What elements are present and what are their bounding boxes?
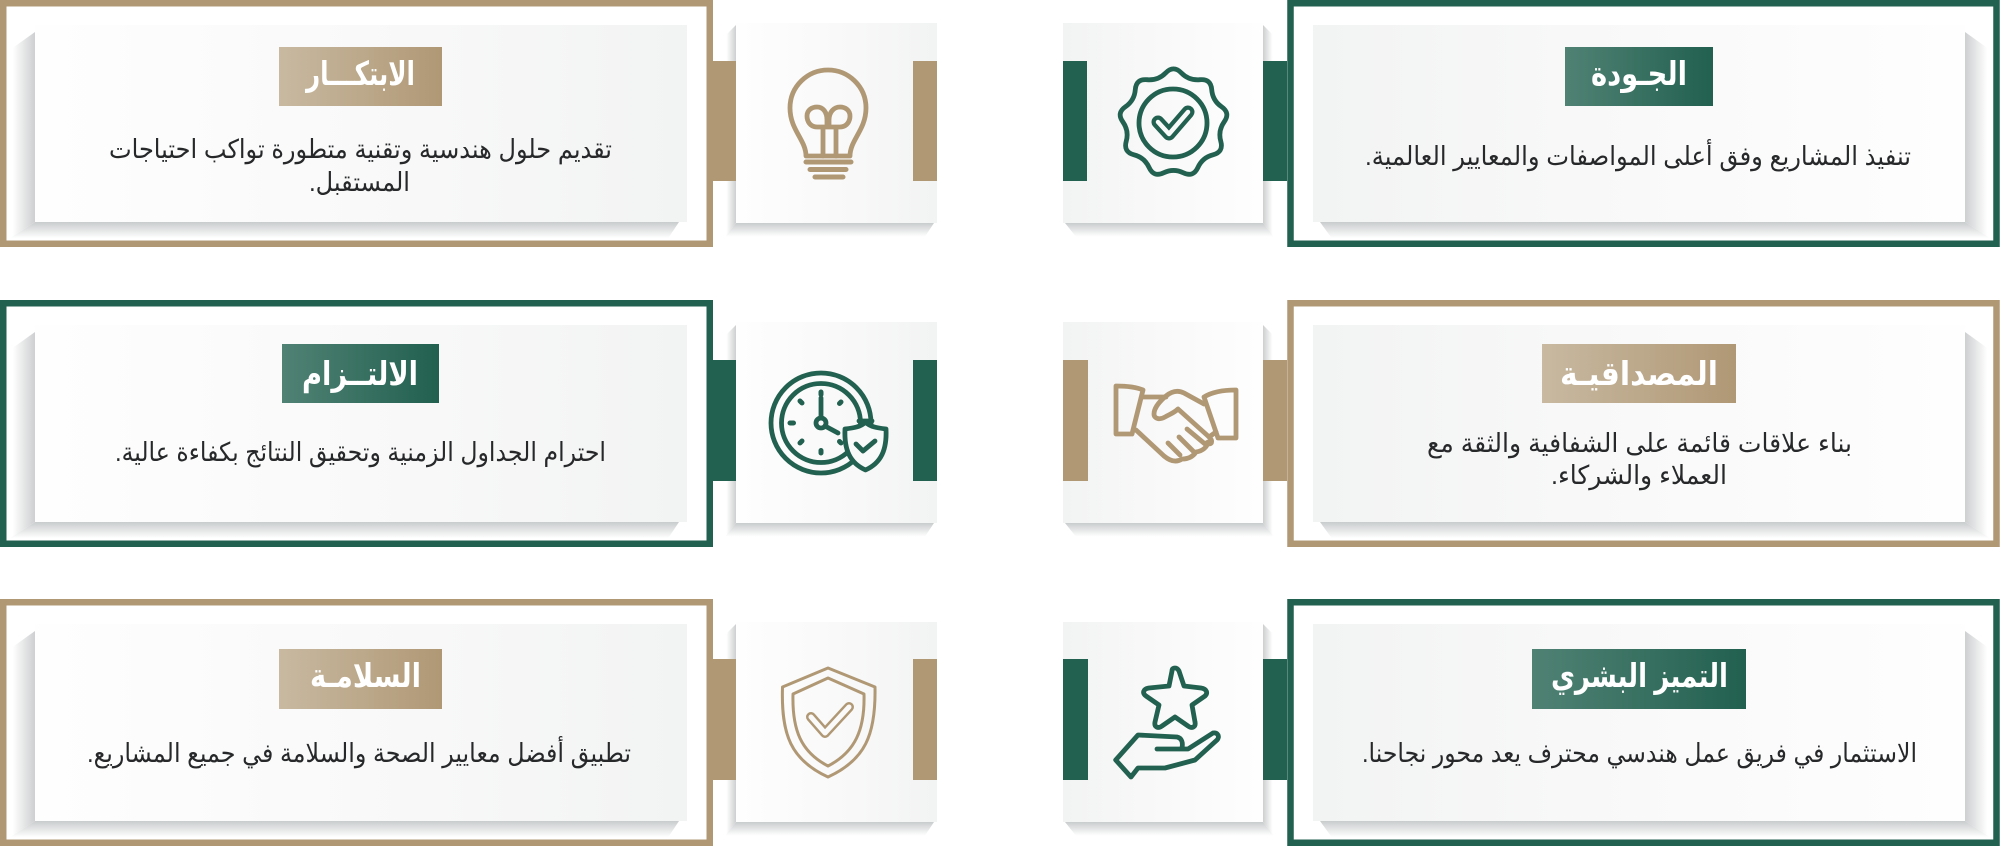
connector band (1263, 659, 1287, 780)
title label (279, 47, 442, 106)
tab (913, 659, 937, 780)
description: الاستثمار في فريق عمل هندسي محترف يعد محور نجاحنا. (1362, 738, 1917, 769)
connector band (713, 659, 736, 780)
icon box (736, 322, 937, 523)
tab (1063, 659, 1088, 780)
tab (913, 61, 937, 181)
icon box (1063, 23, 1263, 223)
connector band (713, 360, 736, 481)
title: الالتــزام (302, 355, 418, 394)
panel shadow (1320, 332, 1993, 540)
text panel (35, 325, 687, 522)
connector band (1263, 61, 1287, 181)
icon box (1063, 622, 1263, 822)
frame (1290, 303, 1996, 544)
description: تطبيق أفضل معايير الصحة والسلامة في جميع المشاريع. (87, 735, 631, 769)
card: quality (1063, 3, 1996, 244)
icon: safety shield (782, 668, 875, 777)
title label (1565, 47, 1713, 106)
icon box shadow (1065, 325, 1275, 538)
icon box shadow (724, 325, 934, 538)
tab (913, 360, 937, 481)
title: السلامـة (310, 657, 421, 694)
title label (1532, 649, 1746, 709)
title label (1542, 344, 1736, 403)
title label (279, 649, 442, 709)
icon: light bulb (790, 70, 866, 177)
icon box (736, 622, 937, 822)
frame (3, 3, 710, 244)
description: تنفيذ المشاريع وفق أعلى المواصفات والمعايير العالمية. (1365, 138, 1911, 172)
card: credibility (1063, 303, 1996, 544)
card: human excellence (1063, 602, 1996, 843)
icon: quality badge (1120, 69, 1227, 174)
icon box shadow (1065, 624, 1275, 837)
title: المصداقيـة (1560, 355, 1718, 392)
title: الجـودة (1591, 55, 1687, 94)
line 1: بناء علاقات قائمة على الشفافية والثقة مع (1427, 428, 1852, 459)
icon box shadow (724, 25, 934, 238)
panel shadow (7, 332, 679, 540)
icon: star over hand (1116, 668, 1218, 777)
connector band (1263, 360, 1287, 481)
card: safety (3, 602, 937, 843)
frame (3, 602, 710, 843)
icon box (736, 23, 937, 223)
card: commitment (3, 303, 937, 544)
description: احترام الجداول الزمنية وتحقيق النتائج بكفاءة عالية. (115, 437, 606, 468)
icon box (1063, 322, 1263, 523)
icon box shadow (724, 624, 934, 837)
icon box shadow (1065, 25, 1275, 238)
frame (1290, 3, 1996, 244)
panel shadow (7, 631, 679, 839)
panel shadow (7, 32, 679, 240)
line 2: العملاء والشركاء. (1551, 460, 1727, 491)
text panel (35, 624, 687, 821)
frame (1290, 602, 1996, 843)
line 2: المستقبل. (309, 167, 410, 197)
tab (1063, 61, 1087, 181)
card: innovation (3, 3, 937, 244)
panel shadow (1320, 32, 1993, 240)
text panel (35, 25, 687, 222)
connector band (713, 61, 736, 181)
icon: clock with shield (771, 373, 886, 473)
frame (3, 303, 710, 544)
text panel (1313, 25, 1965, 222)
tab (1063, 360, 1088, 481)
text panel (1313, 624, 1965, 821)
panel shadow (1320, 631, 1993, 839)
icon: handshake (1116, 386, 1236, 461)
line 1: تقديم حلول هندسية وتقنية متطورة تواكب احتياجات (109, 134, 612, 165)
title label (282, 344, 439, 403)
title: التميز البشري (1551, 657, 1728, 696)
description (109, 134, 612, 197)
description (1427, 428, 1852, 491)
title: الابتكـــار (305, 55, 415, 93)
text panel (1313, 325, 1965, 522)
